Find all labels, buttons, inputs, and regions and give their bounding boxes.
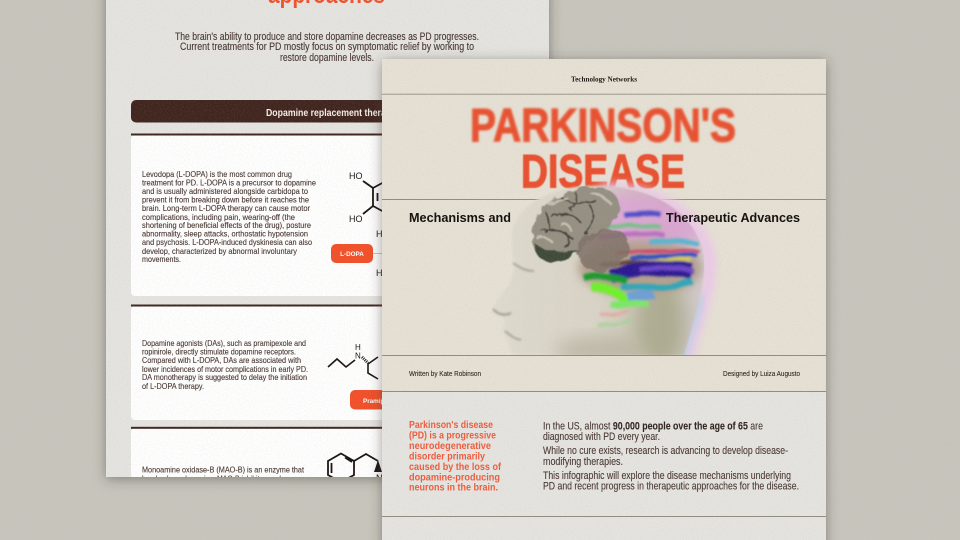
molecule: L-DOPA [350, 172, 382, 276]
levodopa text: movements. [142, 254, 181, 264]
levodopa text: Levodopa (L-DOPA) is the most common drug [142, 169, 292, 179]
intro callout: disorder primarily [409, 450, 485, 462]
levodopa text [142, 169, 316, 264]
MAO-B text: breaks down dopamine. MAO-B inhibitors reduce [142, 474, 292, 484]
molecule: pramipexole [328, 343, 378, 379]
levodopa text: brain. Long-term L-DOPA therapy can cause motor [142, 203, 310, 213]
molecule: pramipexole: N [355, 352, 361, 360]
levodopa text: prevent it from breaking down before it reaches the [142, 194, 309, 204]
rainbow wash [606, 187, 700, 246]
MAO-B text [142, 466, 304, 477]
brain [532, 187, 629, 271]
intro callout: (PD) is a progressive [409, 430, 496, 442]
molecule: L-DOPA: H [376, 229, 382, 239]
molecule: pramipexole: H [355, 343, 361, 352]
card: levodopa [131, 134, 382, 296]
levodopa text: abnormality, sleep attacks, orthostatic hypotension [142, 228, 308, 238]
levodopa text: shortening of beneficial effects of the drug), posture [142, 220, 311, 230]
molecule: MAO-B inhibitor [327, 452, 382, 477]
intro text [543, 420, 799, 492]
pill: pramipexole: Pramipexole [363, 398, 401, 405]
MAO-B text: Monoamine oxidase-B (MAO-B) is an enzyme that [142, 464, 305, 474]
levodopa text: treatment for PD. L-DOPA is a precursor to dopamine [142, 178, 316, 188]
molecule: L-DOPA: HO [349, 214, 362, 224]
dopamine agonists text: Dopamine agonists (DAs), such as pramipexole and [142, 338, 306, 348]
pill: L-DOPA: L-DOPA [340, 251, 364, 258]
intro text: In the US, almost 90,000 people over the age of 65 are [543, 420, 763, 432]
intro callout: neurons in the brain. [409, 482, 498, 494]
intro text: The brain's ability to produce and store dopamine decreases as PD progresses. [175, 31, 479, 43]
levodopa text: and is usually administered alongside carbidopa to [142, 186, 308, 196]
dopamine agonists text: Compared with L-DOPA, DAs are associated with [142, 355, 301, 365]
face [492, 186, 704, 355]
logo: Technology Networks: Technology Networks [571, 74, 637, 84]
intro callout: neurodegenerative [409, 440, 491, 452]
illustration: head with rainbow brain [492, 186, 709, 365]
lower intro panel [382, 391, 826, 540]
dopamine agonists text: lower incidences of motor complications in early PD. [142, 364, 308, 374]
intro callout: Parkinson's disease [409, 419, 493, 431]
title [470, 98, 736, 198]
front page: Parkinson's disease cover [382, 59, 826, 540]
page sheet [382, 59, 826, 540]
pill: pramipexole [350, 390, 382, 410]
intro text: PD and recent progress in therapeutic approaches for the disease. [543, 480, 799, 492]
subtitle right: Therapeutic Advances [666, 210, 800, 225]
title: DISEASE [521, 144, 685, 198]
molecule: L-DOPA: H [376, 268, 382, 278]
intro text: restore dopamine levels. [280, 52, 374, 64]
levodopa text: and psychosis. L-DOPA-induced dyskinesia can also [142, 237, 312, 247]
face shading [636, 285, 684, 365]
back page: treatment approaches [106, 0, 551, 488]
section bar: dopamine replacement therapy: Dopamine replacement therapy [266, 108, 396, 119]
dopamine agonists text: DA monotherapy is suggested to delay the initiation [142, 372, 307, 382]
intro callout [409, 419, 501, 494]
card: MAO-B inhibitors [131, 426, 382, 477]
intro text: modifying therapies. [543, 456, 623, 468]
intro text: diagnosed with PD every year. [543, 431, 660, 443]
pill: L-DOPA [331, 244, 373, 263]
title: PARKINSON'S [470, 98, 736, 152]
intro text [175, 31, 479, 64]
dopamine agonists text [142, 338, 308, 391]
face features [493, 263, 534, 340]
card: dopamine agonists [131, 304, 382, 420]
pink and blue halo [600, 190, 709, 360]
intro text: Current treatments for PD mostly focus on symptomatic relief by working to [180, 41, 474, 53]
rainbow bands [584, 213, 700, 325]
credit: writer: Written by Kate Robinson [409, 369, 481, 378]
levodopa text: develop, characterized by abnormal involuntary [142, 246, 298, 256]
molecule: MAO-B inhibitor: N [376, 473, 382, 483]
intro callout: dopamine-producing [409, 472, 500, 484]
molecule: L-DOPA: HO [349, 171, 362, 181]
intro text: While no cure exists, research is advancing to develop disease- [543, 445, 788, 457]
intro text: This infographic will explore the disease mechanisms underlying [543, 470, 791, 482]
dopamine agonists text: ropinirole, directly stimulate dopamine receptors. [142, 346, 296, 356]
credit: designer: Designed by Luiza Augusto [723, 369, 800, 378]
subtitle left: Mechanisms and [409, 210, 511, 225]
dopamine agonists text: of L-DOPA therapy. [142, 381, 204, 391]
intro callout: caused by the loss of [409, 461, 501, 473]
section bar: dopamine replacement therapy [131, 100, 382, 122]
levodopa text: complications, including pain, wearing-off (the [142, 212, 295, 222]
